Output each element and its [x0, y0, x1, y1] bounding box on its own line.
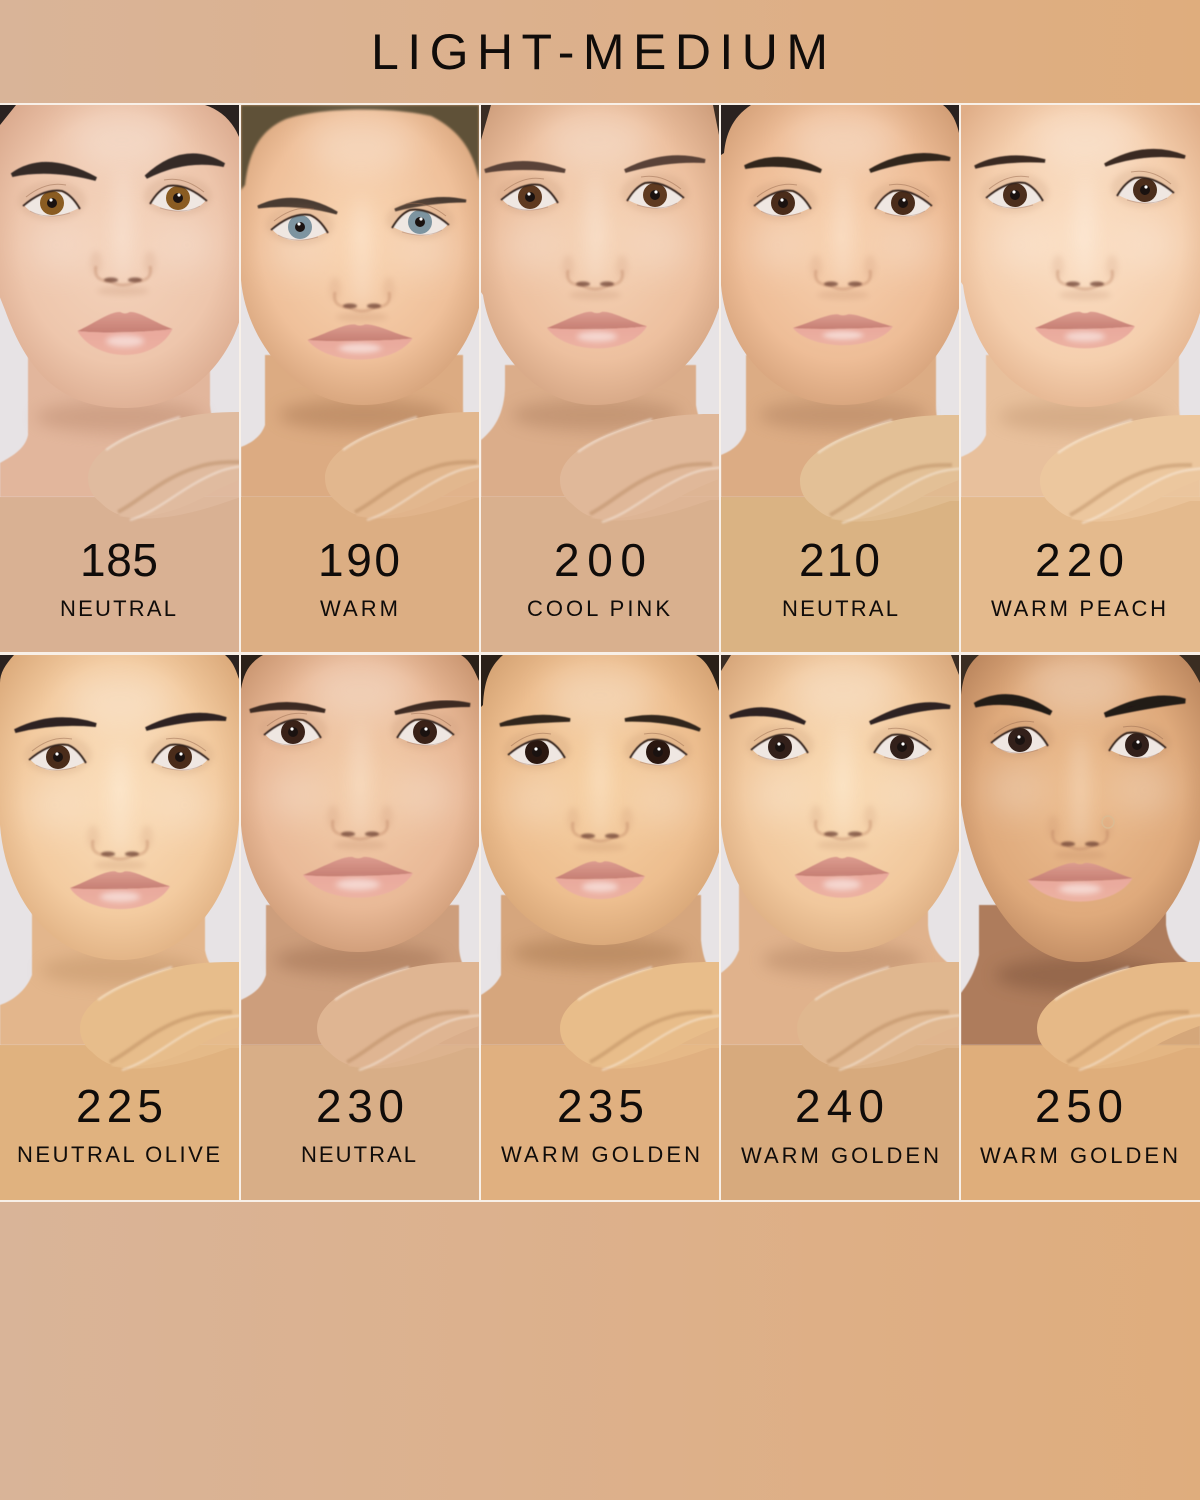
lips [78, 312, 172, 355]
brows [745, 155, 950, 171]
face [721, 650, 964, 952]
card: shade 250 warm golden [961, 655, 1200, 1200]
eyes [18, 181, 86, 221]
neck [481, 365, 719, 497]
swatch [560, 962, 800, 1070]
undertone label: COOL PINK [527, 596, 670, 621]
neck [721, 355, 959, 497]
undertone label: WARM PEACH [991, 596, 1166, 621]
undertone label: NEUTRAL [60, 596, 176, 621]
neck [481, 895, 719, 1045]
shade number: 225 [76, 1080, 163, 1132]
lips [555, 861, 645, 899]
eyes [266, 205, 334, 245]
card: shade 230 neutral [241, 655, 479, 1200]
card: shade 185 neutral [0, 105, 239, 652]
swatch [1040, 415, 1200, 523]
hair [0, 105, 239, 137]
brows [500, 716, 700, 730]
undertone label: WARM [320, 596, 398, 621]
eyes [746, 725, 814, 765]
lips [303, 857, 413, 898]
brows [250, 702, 470, 713]
lips [794, 857, 890, 898]
undertone label: WARM GOLDEN [741, 1143, 939, 1168]
face [0, 650, 239, 960]
nose ring [1102, 816, 1114, 828]
eyes [749, 181, 817, 221]
brows [485, 157, 705, 171]
swatch [800, 415, 1040, 523]
neck [721, 885, 959, 1045]
shade number: 210 [799, 534, 880, 586]
grid backing lines [0, 103, 1200, 1202]
eyes [259, 710, 327, 750]
neck [0, 355, 239, 497]
swatch [88, 412, 328, 520]
hair [961, 655, 1200, 695]
swatch [560, 414, 800, 522]
shade number: 220 [1035, 534, 1124, 586]
lips [547, 312, 647, 348]
swatch [80, 962, 320, 1070]
eyes [986, 718, 1054, 758]
hair [481, 655, 719, 707]
undertone label: WARM GOLDEN [501, 1142, 700, 1167]
eyes [503, 730, 571, 770]
neck [241, 905, 479, 1045]
lips [308, 324, 412, 360]
eyes [496, 175, 564, 215]
shade number: 235 [557, 1080, 644, 1132]
undertone label: NEUTRAL [782, 596, 898, 621]
hair [481, 105, 719, 140]
neck [241, 355, 479, 497]
hair [721, 655, 959, 675]
shade number: 185 [80, 534, 158, 586]
lips [70, 871, 170, 909]
hair [241, 105, 479, 190]
swatch [797, 962, 1037, 1070]
card: shade 210 neutral [721, 105, 959, 652]
lips [1028, 863, 1132, 902]
hair [241, 655, 479, 689]
shade number: 230 [316, 1080, 404, 1132]
swatch [1037, 962, 1200, 1070]
hair [0, 655, 239, 683]
undertone label: WARM GOLDEN [980, 1143, 1178, 1168]
brows [975, 151, 1185, 167]
undertone label: NEUTRAL [301, 1142, 416, 1167]
brows [15, 715, 226, 731]
brows [975, 697, 1185, 715]
card: shade 235 warm golden [481, 655, 719, 1200]
swatch [317, 962, 557, 1070]
hair [721, 105, 959, 155]
face [956, 100, 1200, 407]
brows [258, 198, 466, 213]
swatch [325, 412, 565, 520]
eyes [24, 735, 92, 775]
brows [730, 704, 950, 723]
lips [793, 314, 893, 345]
brows [12, 155, 224, 179]
eyes [981, 173, 1049, 213]
undertone label: NEUTRAL OLIVE [17, 1142, 220, 1167]
neck [0, 905, 239, 1045]
neck [961, 905, 1200, 1045]
title: LIGHT-MEDIUM [371, 24, 828, 80]
shade number: 200 [554, 534, 646, 586]
face [716, 100, 964, 405]
face [476, 650, 724, 945]
face [476, 100, 724, 405]
card: shade 220 warm peach [961, 105, 1200, 652]
face [956, 650, 1200, 962]
card: shade 190 warm [241, 105, 479, 652]
card: shade 225 neutral olive [0, 655, 239, 1200]
lips [1035, 312, 1135, 348]
card: shade 240 warm golden [721, 655, 959, 1200]
neck [961, 355, 1200, 497]
shade number: 190 [318, 534, 400, 586]
face [236, 650, 484, 952]
shade number: 250 [1035, 1080, 1123, 1132]
shade number: 240 [795, 1080, 884, 1132]
face [236, 100, 484, 405]
card: shade 200 cool pink [481, 105, 719, 652]
face [0, 100, 245, 408]
